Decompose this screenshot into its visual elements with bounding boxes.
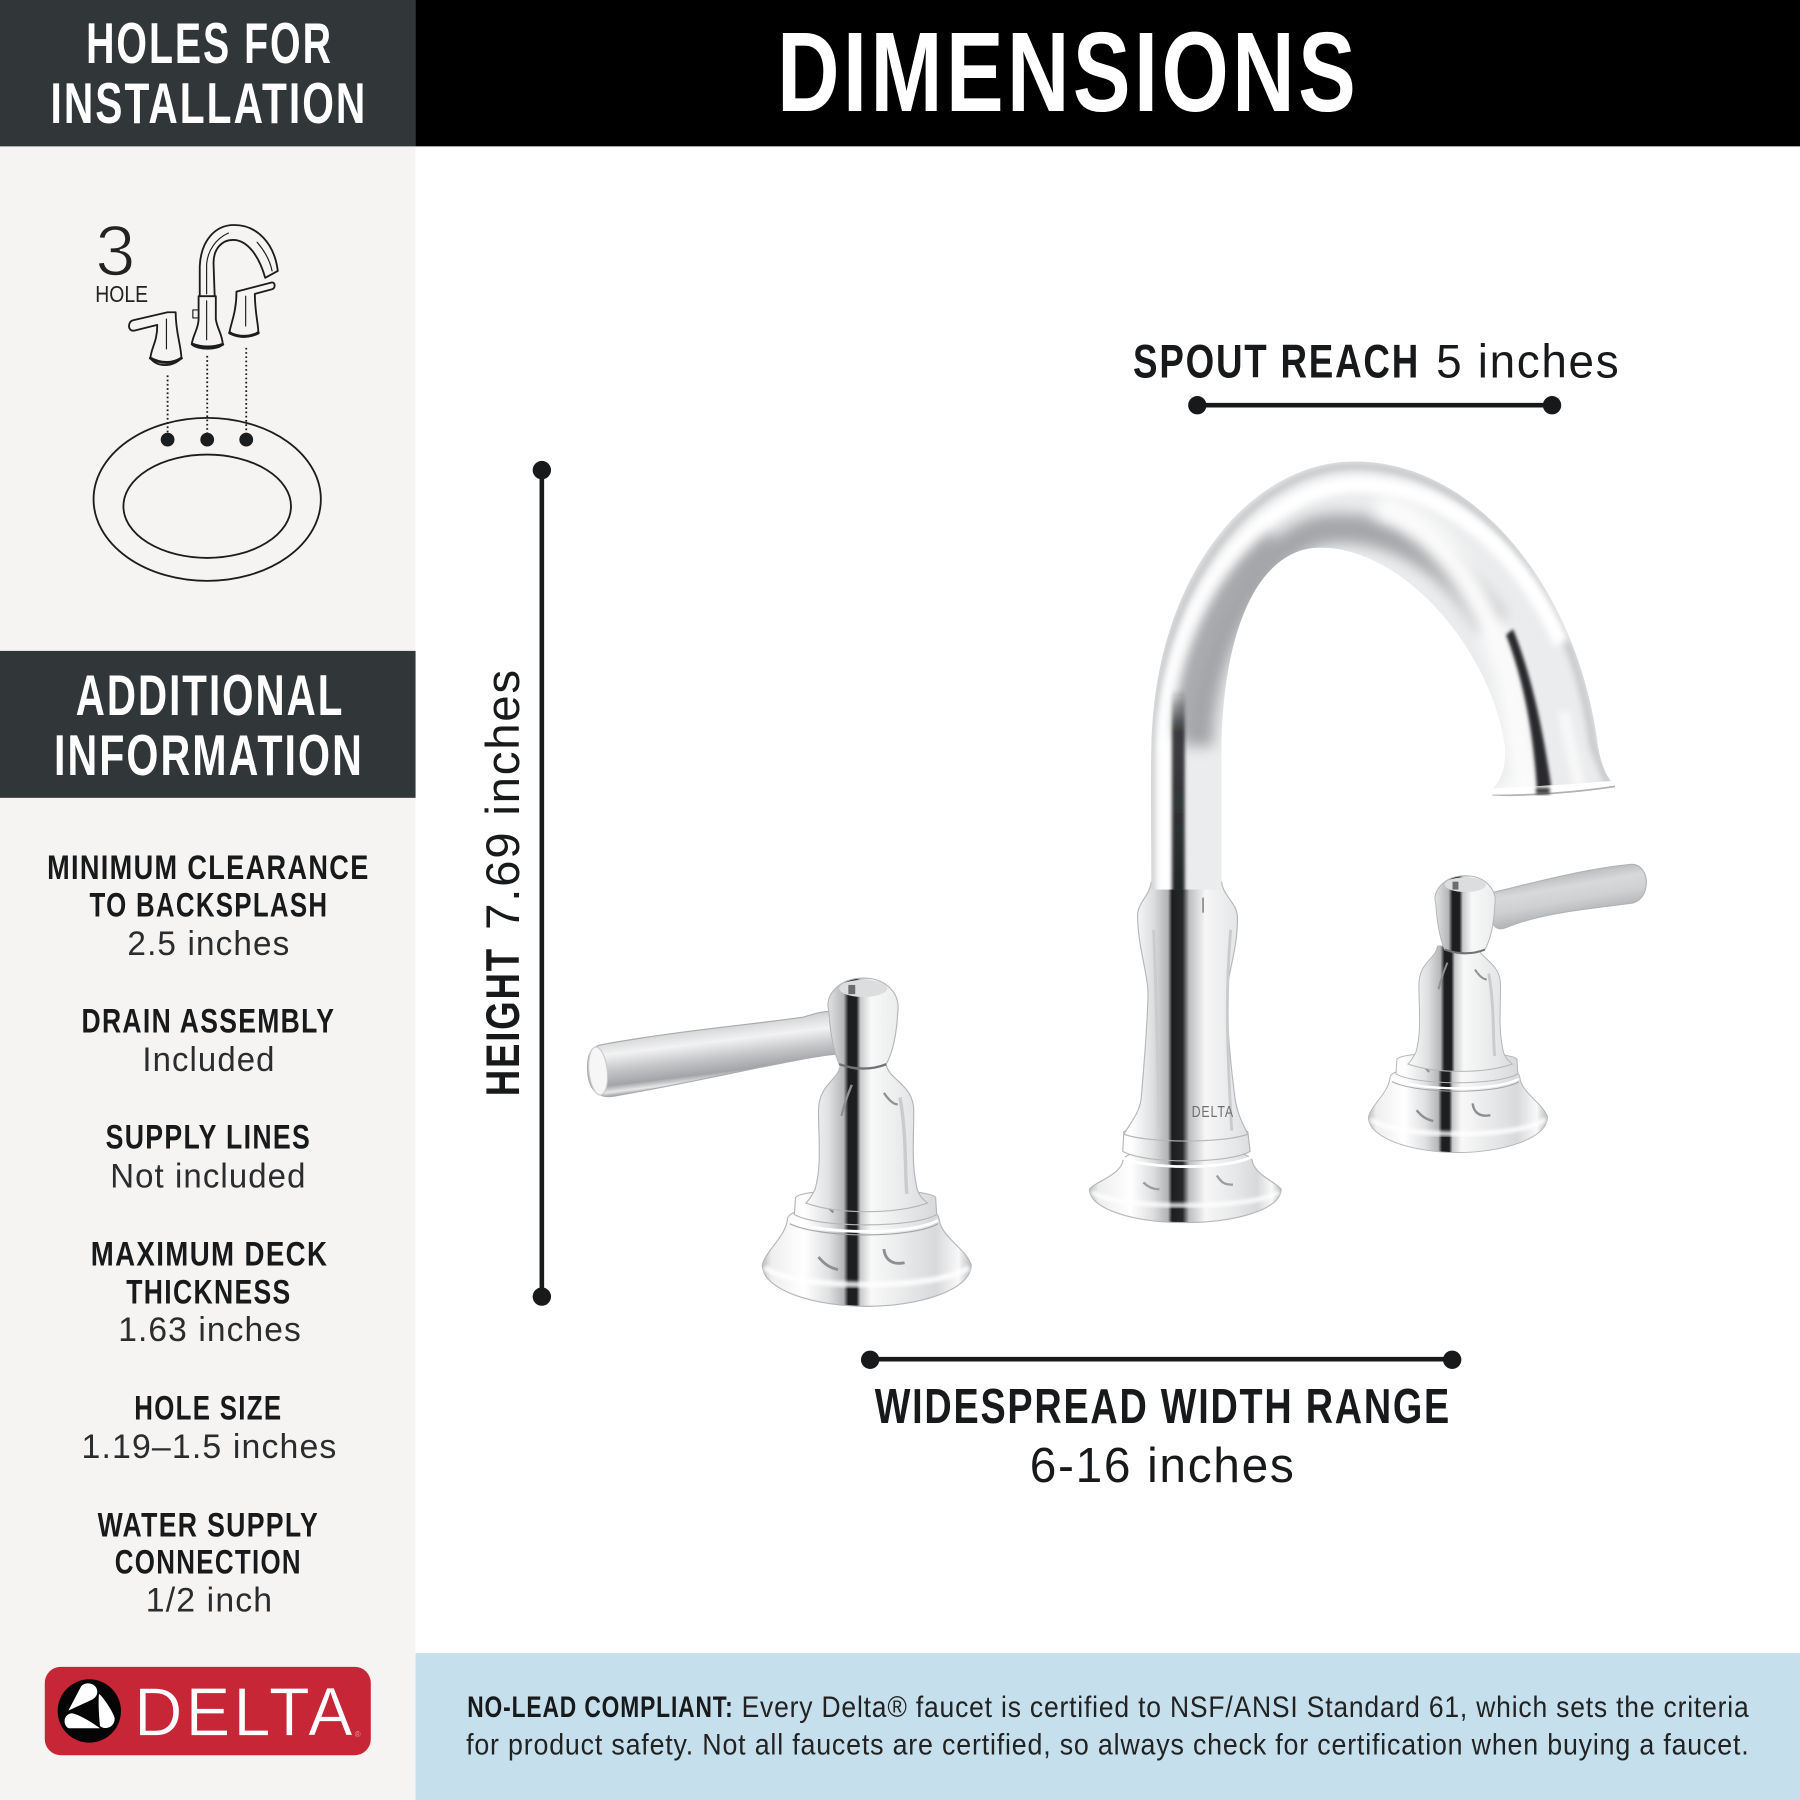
spout tube [1148, 459, 1619, 918]
spec: maximum deck thickness: THICKNESS [126, 1274, 292, 1312]
spec: minimum clearance [47, 849, 370, 963]
spec: minimum clearance: TO BACKSPLASH [90, 887, 328, 925]
dimension: height: 7.69 inches [476, 668, 529, 930]
spec: supply lines: SUPPLY LINES [106, 1119, 311, 1157]
logo: delta: ® [355, 1730, 361, 1739]
heading: additional information: ADDITIONAL [76, 664, 344, 728]
spec: water supply connection: WATER SUPPLY [98, 1507, 319, 1545]
faucet: spout and body [1089, 459, 1619, 1223]
dimension: height: HEIGHT [476, 947, 529, 1096]
spec: water supply connection: 1/2 inch [146, 1582, 273, 1620]
mini faucet right handle [230, 282, 275, 337]
spec: minimum clearance: 2.5 inches [127, 925, 290, 963]
spec: maximum deck thickness: 1.63 inches [118, 1311, 302, 1349]
heading: holes for installation: INSTALLATION [51, 72, 367, 136]
number of holes label: HOLE [95, 281, 148, 307]
faucet: left handle [586, 978, 971, 1306]
body [1124, 882, 1248, 1141]
heading: holes for installation [0, 0, 416, 146]
dimension: height [476, 461, 551, 1306]
number of holes label [95, 213, 148, 307]
sink basin [94, 418, 321, 581]
spec: hole size: 1.19–1.5 inches [82, 1428, 338, 1466]
logo emblem [58, 1679, 121, 1743]
dimension: spout reach: 5 inches [1436, 335, 1620, 388]
heading: additional information: INFORMATION [54, 724, 364, 788]
heading: dimensions [416, 0, 1800, 146]
callout: no-lead compliant [416, 1653, 1800, 1800]
spec: drain assembly: DRAIN ASSEMBLY [82, 1003, 335, 1041]
heading: dimensions: DIMENSIONS [777, 9, 1359, 136]
engraved brand: DELTA [1192, 1103, 1234, 1121]
number of holes label: 3 [95, 213, 135, 292]
panel: left sidebar [0, 0, 416, 1800]
dotted guide lines [168, 348, 246, 434]
dimension: spout reach [1133, 335, 1620, 414]
callout: no-lead compliant: NO-LEAD COMPLIANT: [467, 1691, 734, 1724]
left lever [588, 1011, 857, 1097]
logo: delta [45, 1667, 371, 1755]
right lever [1490, 864, 1646, 929]
spec: water supply connection: CONNECTION [115, 1543, 302, 1581]
drilled holes [161, 433, 253, 447]
base [1089, 1148, 1281, 1223]
dimension: spout reach: SPOUT REACH [1133, 335, 1420, 388]
spec: water supply connection [98, 1507, 319, 1620]
spec: drain assembly: Included [142, 1041, 276, 1079]
dimension: widespread width range [861, 1351, 1461, 1493]
logo: delta: DELTA [134, 1674, 356, 1751]
spec: minimum clearance: MINIMUM CLEARANCE [47, 849, 370, 887]
mini faucet left handle [129, 312, 181, 365]
mini faucet spout [200, 225, 278, 296]
spec: maximum deck thickness [91, 1236, 328, 1349]
faucet: right handle [1368, 864, 1646, 1153]
spec: hole size: HOLE SIZE [134, 1389, 282, 1427]
spec: supply lines [106, 1119, 311, 1196]
dimension: widespread width range: 6-16 inches [1030, 1438, 1295, 1493]
heading: holes for installation: HOLES FOR [86, 12, 333, 76]
spec: hole size [82, 1389, 338, 1466]
spec: maximum deck thickness: MAXIMUM DECK [91, 1236, 328, 1274]
spec: drain assembly [82, 1003, 335, 1079]
heading: additional information [0, 651, 416, 798]
icon: three hole sink installation diagram [94, 213, 321, 581]
spec: supply lines: Not included [110, 1158, 307, 1196]
dimension: widespread width range: WIDESPREAD WIDTH RANGE [875, 1379, 1451, 1434]
mini faucet centre body [192, 296, 223, 349]
